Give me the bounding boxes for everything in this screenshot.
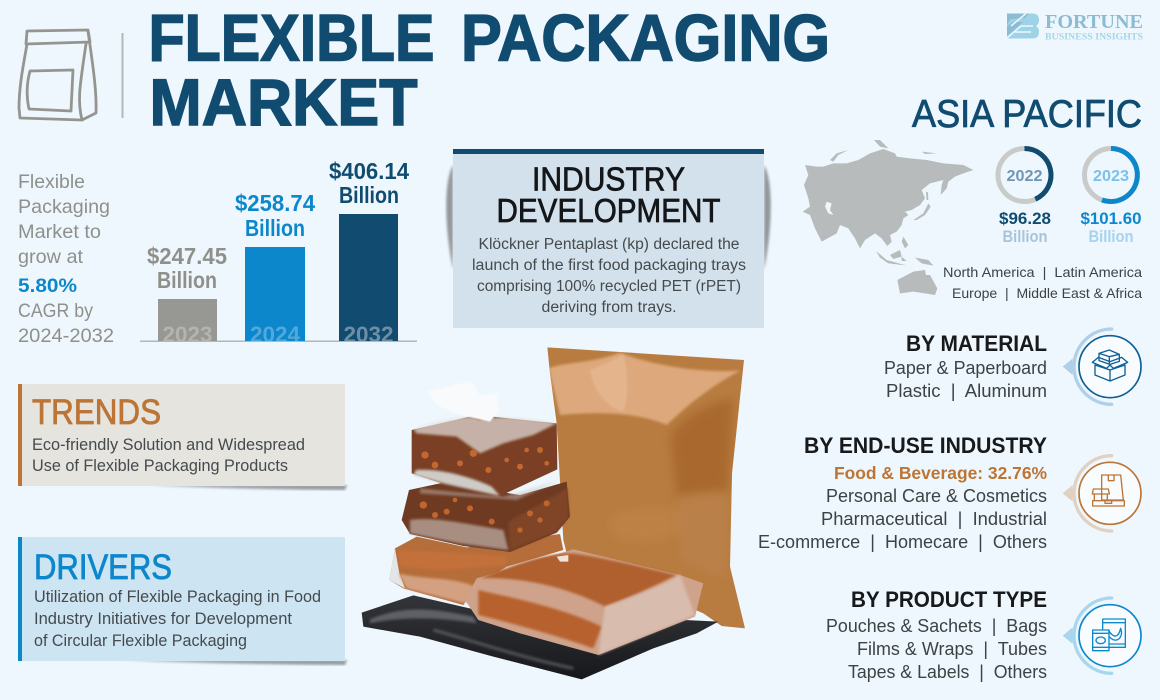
- bar: 2032: $406.14: [329, 158, 409, 184]
- icon: product pouches: [1063, 598, 1141, 673]
- panel: drivers: of Circular Flexible Packaging: [34, 631, 247, 650]
- title: PACKAGING: [461, 0, 830, 74]
- text: market growth: 5.80%: [18, 275, 77, 297]
- donut: 2022: $96.28: [999, 210, 1051, 228]
- donut: 2023: $101.60: [1080, 210, 1142, 228]
- segment: by product type: Pouches & Sachets | Bags: [826, 615, 1047, 636]
- body text: comprising 100% recycled PET (rPET): [477, 278, 741, 295]
- text: market growth: grow at: [18, 246, 84, 268]
- panel: trends: [18, 384, 347, 490]
- donut: 2023: [1080, 148, 1142, 246]
- divider: [122, 33, 124, 118]
- bar: 2032: 2032: [344, 322, 394, 347]
- text: market growth: Market to: [18, 221, 101, 243]
- donut: 2022: Billion: [1002, 228, 1048, 246]
- black base bag: [362, 595, 718, 679]
- segment: by material: [884, 331, 1047, 401]
- photo: flexible packaging bags: [362, 343, 753, 679]
- segment: by end-use industry: E-commerce | Homecare | Others: [758, 531, 1047, 552]
- front brown packet: [465, 549, 703, 655]
- donut: 2023: Billion: [1088, 228, 1134, 246]
- panel: industry development: [446, 149, 771, 328]
- large brown bag: [540, 343, 753, 633]
- bar chart: market size: [140, 158, 417, 347]
- icon: packaging bag: [19, 30, 96, 120]
- bar: 2023: Billion: [157, 267, 217, 293]
- bar: 2023: [147, 243, 227, 347]
- segment: by end-use industry: Food & Beverage: 32.76%: [834, 463, 1047, 483]
- bar: 2023: $247.45: [147, 243, 227, 269]
- donut: 2022: [998, 148, 1051, 246]
- bar: 2024: $258.74: [235, 190, 315, 216]
- panel: trends: Eco-friendly Solution and Widespread: [32, 435, 305, 454]
- body text: launch of the first food packaging trays: [472, 257, 746, 274]
- bar: 2032: Billion: [339, 182, 399, 208]
- heading: Asia Pacific: ASIA PACIFIC: [912, 93, 1142, 136]
- heading: [496, 160, 720, 229]
- body text: [472, 236, 746, 316]
- bar: 2024: 2024: [250, 322, 301, 347]
- logo: Fortune Business Insights: BUSINESS INSIGHTS: [1045, 33, 1143, 43]
- text: market growth: 2024-2032: [18, 325, 114, 347]
- segment: by end-use industry: [758, 433, 1047, 552]
- panel: drivers: Utilization of Flexible Packaging in Food: [34, 587, 321, 606]
- segment: by end-use industry: Pharmaceutical | Industrial: [821, 508, 1047, 529]
- heading: INDUSTRY: [532, 160, 685, 198]
- segment: by product type: Films & Wraps | Tubes: [857, 638, 1047, 659]
- map: Asia Pacific: [803, 140, 973, 295]
- text: market growth: CAGR by: [18, 300, 93, 322]
- bar: 2032: [329, 158, 409, 347]
- donut: 2022: 2022: [1006, 168, 1042, 185]
- panel: drivers: Industry Initiatives for Development: [34, 609, 292, 628]
- middle bean bag: [402, 480, 570, 552]
- segment: by end-use industry: Personal Care & Cosmetics: [826, 485, 1047, 506]
- logo: Fortune Business Insights: [1007, 11, 1143, 43]
- top bean bag with tied wrap: [412, 381, 557, 496]
- segment: by product type: [826, 587, 1047, 682]
- segment: by material: BY MATERIAL: [906, 331, 1047, 356]
- segment: by product type: Tapes & Labels | Others: [848, 661, 1047, 682]
- text: other regions: Europe | Middle East & Africa: [952, 285, 1142, 301]
- panel: trends: Use of Flexible Packaging Products: [32, 456, 288, 475]
- panel: drivers: DRIVERS: [34, 548, 172, 587]
- logo: Fortune Business Insights: FORTUNE: [1045, 11, 1143, 33]
- text: market growth: Packaging: [18, 196, 110, 218]
- segment: by material: Paper & Paperboard: [884, 357, 1047, 378]
- title: FLEXIBLE: [148, 0, 434, 74]
- segment: by end-use industry: BY END-USE INDUSTRY: [804, 433, 1047, 458]
- low brown packet: [389, 534, 563, 605]
- body text: Klöckner Pentaplast (kp) declared the: [478, 236, 740, 253]
- segment: by product type: BY PRODUCT TYPE: [851, 587, 1047, 612]
- title: MARKET: [150, 65, 418, 139]
- bar: 2023: 2023: [162, 322, 212, 347]
- panel: trends: TRENDS: [32, 393, 161, 432]
- segment: by material: Plastic | Aluminum: [886, 380, 1047, 401]
- heading: DEVELOPMENT: [496, 192, 720, 229]
- bar: 2024: Billion: [245, 215, 305, 241]
- body text: deriving from trays.: [542, 299, 676, 316]
- text: other regions: North America | Latin America: [943, 264, 1142, 280]
- title: [148, 0, 830, 139]
- bar: 2024: [235, 190, 315, 347]
- text: other regions: [943, 264, 1142, 301]
- text: market growth: [18, 171, 114, 347]
- icon: end-use boxes: [1063, 456, 1141, 531]
- icon: material boxes: [1063, 329, 1141, 404]
- donut: 2023: 2023: [1093, 168, 1129, 185]
- panel: drivers: [18, 537, 347, 665]
- text: market growth: Flexible: [18, 171, 85, 193]
